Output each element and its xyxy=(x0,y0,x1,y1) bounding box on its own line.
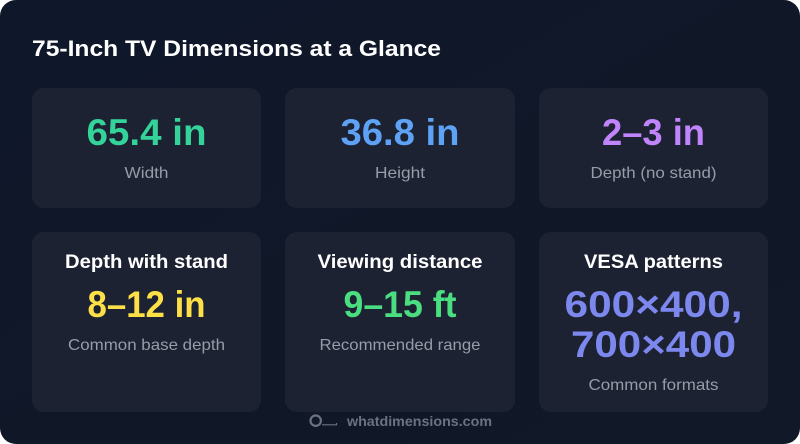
card: viewing distance: 9–15 ft xyxy=(344,284,456,325)
card: viewing distance: Viewing distance xyxy=(318,252,482,273)
card: width: 65.4 in xyxy=(86,112,206,153)
card: depth with stand xyxy=(32,232,261,412)
card: depth with stand: Depth with stand xyxy=(65,252,228,273)
card: VESA patterns: 700×400 xyxy=(571,324,736,365)
card: depth no stand: Depth (no stand) xyxy=(590,165,716,182)
card: depth no stand xyxy=(539,88,768,208)
card: height xyxy=(285,88,515,208)
card: viewing distance xyxy=(285,232,515,412)
card: depth with stand: 8–12 in xyxy=(88,284,206,325)
footer website: whatdimensions.com xyxy=(346,413,492,429)
title: 75-Inch TV Dimensions at a Glance xyxy=(32,36,441,61)
footer logo icon xyxy=(310,416,336,426)
card: viewing distance: Recommended range xyxy=(320,337,481,354)
card: height: 36.8 in xyxy=(340,112,460,153)
card: VESA patterns: VESA patterns xyxy=(584,252,723,273)
card: VESA patterns xyxy=(539,232,768,412)
card: width: Width xyxy=(124,165,168,182)
card: height: Height xyxy=(375,165,426,182)
card: VESA patterns: 600×400, xyxy=(564,284,742,325)
card: VESA patterns: Common formats xyxy=(588,377,718,394)
card: width xyxy=(32,88,261,208)
card: depth no stand: 2–3 in xyxy=(602,112,705,153)
card: depth with stand: Common base depth xyxy=(68,337,225,354)
